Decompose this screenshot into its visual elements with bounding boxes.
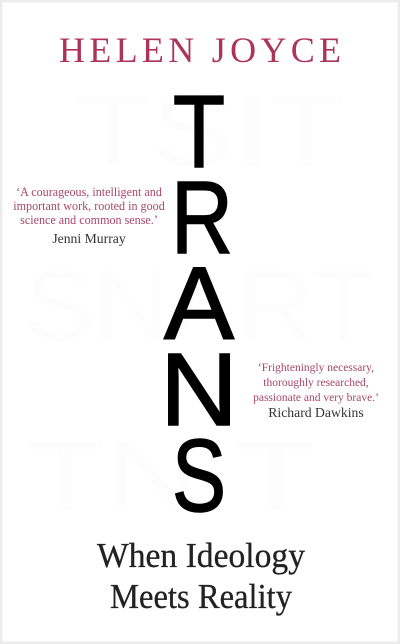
title: TRANS stacked vertically: S <box>172 418 226 533</box>
quote: Jenni Murray: Jenni Murray <box>52 231 126 246</box>
title: TRANS stacked vertically: R <box>171 160 233 275</box>
title: TRANS stacked vertically: A <box>164 246 234 361</box>
quote: Richard Dawkins <box>253 362 379 420</box>
quote: Jenni Murray: ‘A courageous, intelligent and <box>16 185 162 199</box>
author name: HELEN JOYCE <box>59 30 341 70</box>
ghosted background lettering: TN T <box>25 420 315 532</box>
quote: Richard Dawkins: ‘Frighteningly necessary, <box>258 362 374 374</box>
quote: Jenni Murray <box>13 185 165 246</box>
quote: Richard Dawkins: thoroughly researched, <box>263 377 369 389</box>
subtitle: Meets Reality <box>110 577 292 616</box>
subtitle <box>97 536 305 616</box>
quote: Richard Dawkins: Richard Dawkins <box>268 405 364 420</box>
quote: Jenni Murray: important work, rooted in good <box>13 199 165 213</box>
title: TRANS stacked vertically: N <box>160 332 238 447</box>
title: TRANS stacked vertically <box>160 74 238 533</box>
subtitle: When Ideology <box>97 536 305 575</box>
quote: Jenni Murray: science and common sense.’ <box>20 213 158 227</box>
title: TRANS stacked vertically: T <box>173 74 225 189</box>
ghosted background lettering <box>25 75 375 532</box>
ghosted background lettering: SNART <box>25 250 375 362</box>
quote: Richard Dawkins: passionate and very brave.’ <box>253 392 379 404</box>
ghosted background lettering: TSIT <box>75 75 345 187</box>
